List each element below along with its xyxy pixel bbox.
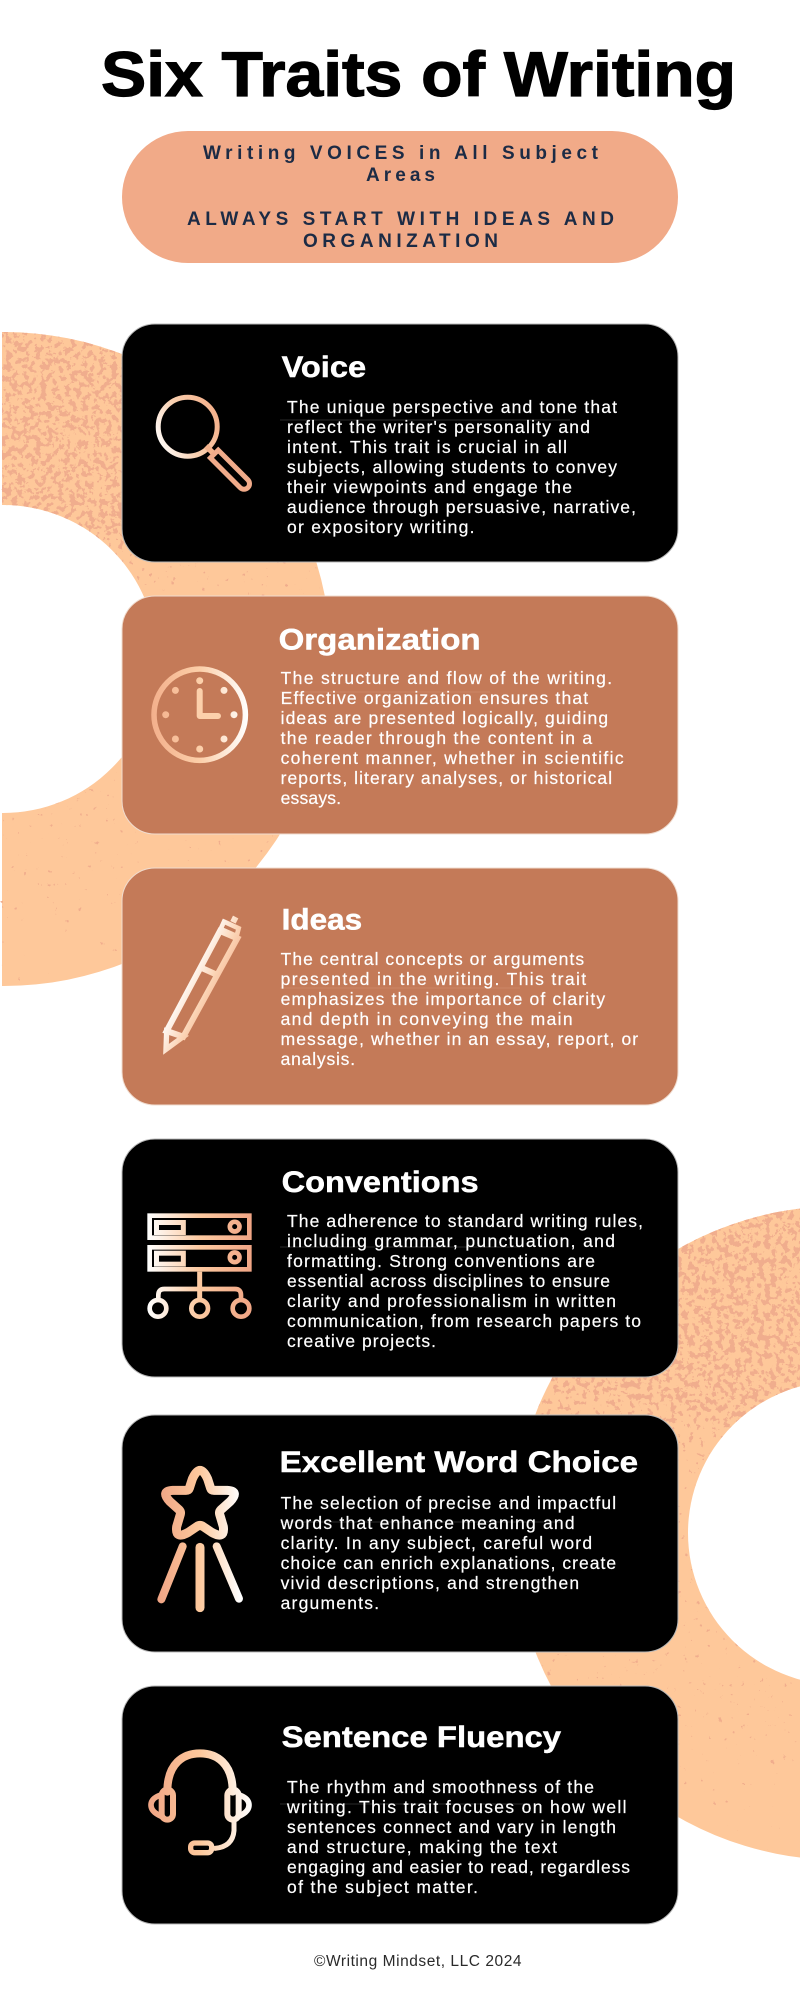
footer copyright: ©Writing Mindset, LLC 2024 <box>314 1953 522 1970</box>
text: sentence fluency description: engaging and easier to read, regardless <box>287 1857 630 1877</box>
text: sentence fluency description: of the subject matter. <box>287 1877 478 1897</box>
text: conventions description <box>287 1211 643 1351</box>
text: voice description: intent. This trait is crucial in all <box>287 437 567 457</box>
subtitle banner: Areas <box>366 165 435 186</box>
text: organization description: coherent manner, whether in scientific <box>281 748 624 768</box>
panel: sentence fluency <box>122 1686 678 1924</box>
panel: ideas <box>122 868 678 1105</box>
icon: clock <box>154 669 245 760</box>
decorative ring: right <box>535 1208 800 1858</box>
text: sentence fluency description <box>286 1777 630 1897</box>
text: voice description <box>287 397 636 537</box>
text: conventions description: essential across disciplines to ensure <box>287 1271 610 1291</box>
text: word choice description: choice can enrich explanations, create <box>281 1553 616 1573</box>
text: ideas description: presented in the writing. This trait <box>281 969 586 989</box>
text: conventions description: formatting. Strong conventions are <box>287 1251 595 1271</box>
text: voice description: reflect the writer's personality and <box>287 417 590 437</box>
text: ideas description: The central concepts or arguments <box>281 949 584 969</box>
text: word choice description: clarity. In any subject, careful word <box>281 1533 592 1553</box>
text: voice description: subjects, allowing students to convey <box>287 457 617 477</box>
heading: ideas: Ideas <box>282 904 362 936</box>
title: Six Traits of Writing <box>101 40 736 110</box>
text: voice description: or expository writing. <box>287 517 474 537</box>
text: word choice description <box>280 1493 616 1613</box>
text: ideas description <box>281 949 638 1069</box>
text: sentence fluency description: and structure, making the text <box>287 1837 557 1857</box>
text: ideas description: message, whether in an essay, report, or <box>281 1029 638 1049</box>
icon: magnifying glass <box>158 397 252 491</box>
panel: conventions <box>122 1139 678 1377</box>
icon: shooting star <box>161 1470 239 1608</box>
text: organization description: ideas are presented logically, guiding <box>281 708 608 728</box>
text: sentence fluency description: sentences connect and vary in length <box>287 1817 616 1837</box>
text: conventions description: including grammar, punctuation, and <box>287 1231 615 1251</box>
heading: conventions: Conventions <box>282 1166 479 1199</box>
subtitle banner: Writing VOICES in All Subject <box>203 143 599 164</box>
text: organization description: Effective organization ensures that <box>281 688 588 708</box>
text: ideas description: analysis. <box>281 1049 355 1069</box>
text: sentence fluency description: writing. This trait focuses on how well <box>286 1797 626 1817</box>
heading: sentence fluency: Sentence Fluency <box>282 1721 561 1754</box>
text: organization description <box>281 668 624 808</box>
panel: organization <box>122 596 678 834</box>
icon: server network <box>150 1216 249 1317</box>
heading: voice: Voice <box>282 351 366 384</box>
text: conventions description: creative projects. <box>287 1331 436 1351</box>
subtitle banner: ALWAYS START WITH IDEAS AND <box>187 209 614 230</box>
panel: excellent word choice <box>122 1415 678 1652</box>
heading: excellent word choice: Excellent Word Choice <box>280 1446 638 1479</box>
text: voice description: The unique perspective and tone that <box>287 397 617 417</box>
text: organization description: the reader through the content in a <box>281 728 592 748</box>
heading: organization: Organization <box>279 624 481 657</box>
text: organization description: essays. <box>281 788 341 808</box>
text: word choice description: words that enhance meaning and <box>280 1513 575 1533</box>
text: conventions description: communication, from research papers to <box>287 1311 641 1331</box>
text: word choice description: arguments. <box>281 1593 379 1613</box>
panel: voice <box>122 324 678 562</box>
icon: pen <box>166 917 239 1049</box>
text: ideas description: and depth in conveying the main <box>281 1009 573 1029</box>
subtitle banner <box>122 131 678 263</box>
icon: headset <box>151 1753 249 1853</box>
text: word choice description: vivid descriptions, and strengthen <box>281 1573 579 1593</box>
text: conventions description: The adherence to standard writing rules, <box>287 1211 643 1231</box>
text: word choice description: The selection of precise and impactful <box>281 1493 616 1513</box>
text: sentence fluency description: The rhythm and smoothness of the <box>287 1777 594 1797</box>
text: organization description: reports, literary analyses, or historical <box>281 768 612 788</box>
text: conventions description: clarity and professionalism in written <box>287 1291 616 1311</box>
text: organization description: The structure and flow of the writing. <box>281 668 612 688</box>
text: voice description: audience through persuasive, narrative, <box>287 497 636 517</box>
text: ideas description: emphasizes the importance of clarity <box>281 989 605 1009</box>
decorative ring: left <box>2 325 337 995</box>
text: voice description: their viewpoints and engage the <box>287 477 572 497</box>
subtitle banner: ORGANIZATION <box>303 231 498 252</box>
